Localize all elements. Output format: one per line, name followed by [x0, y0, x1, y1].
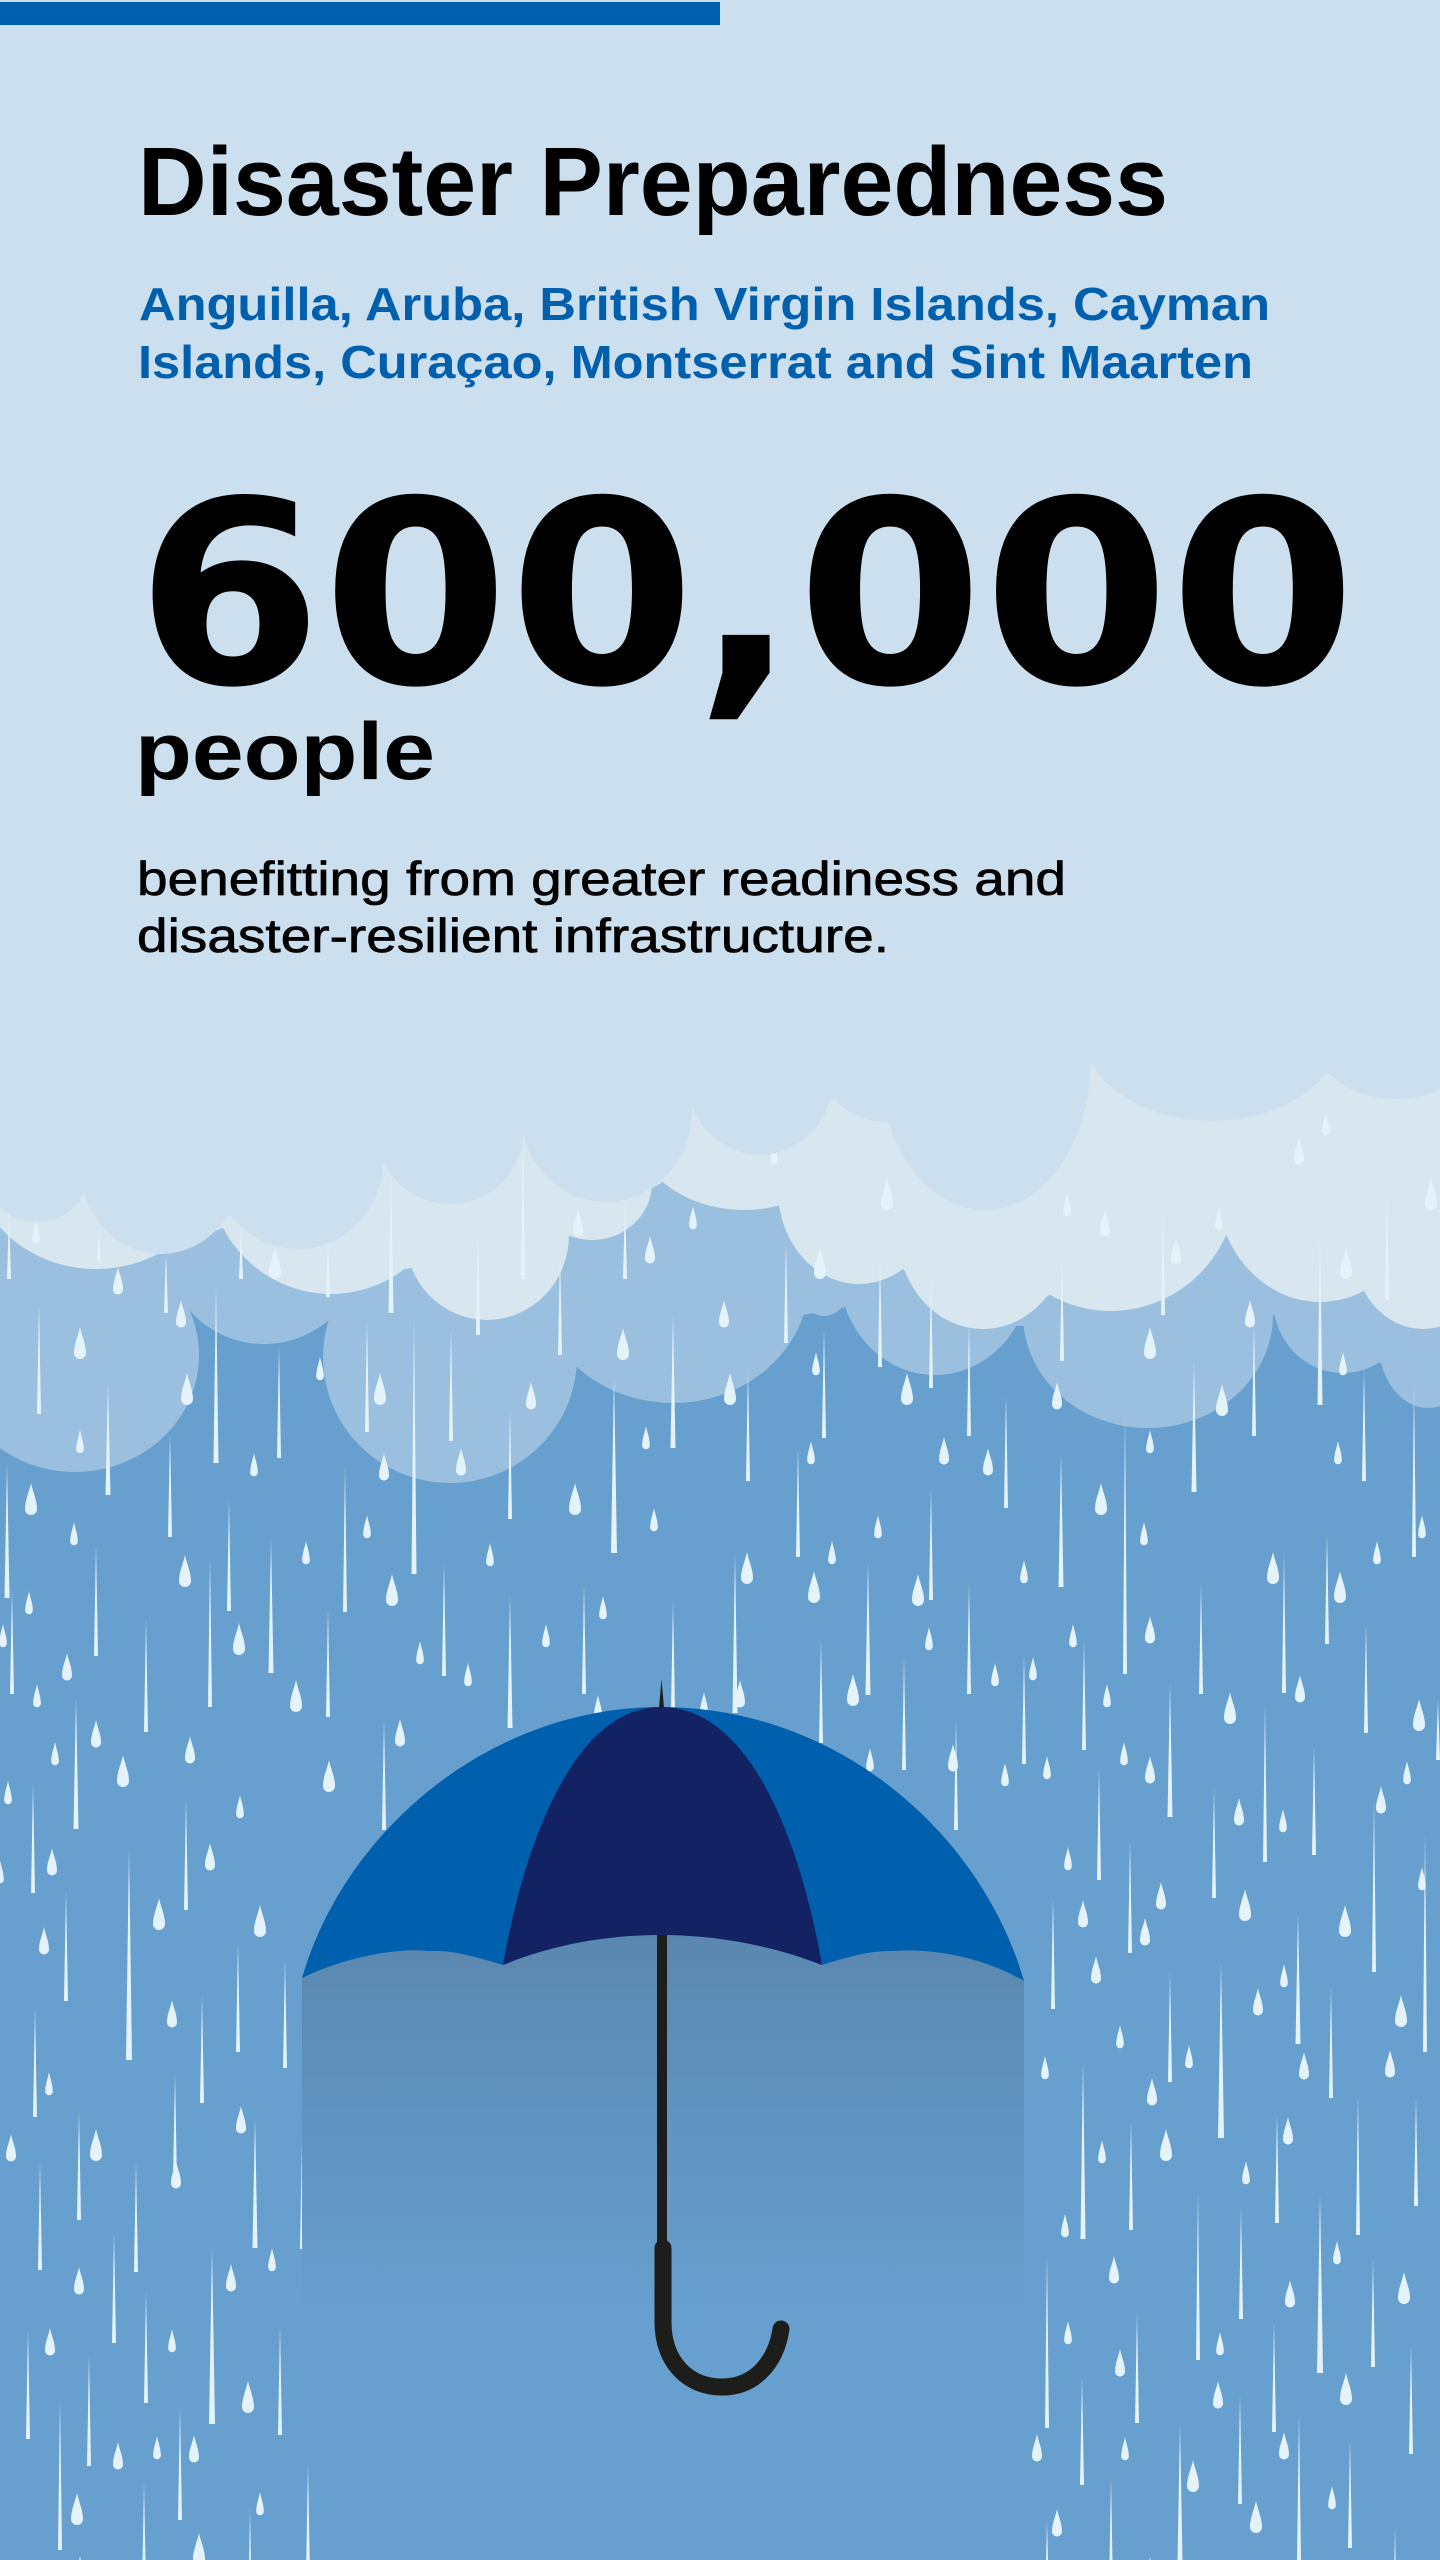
subtitle: territories: Anguilla, Aruba, British Virgin Islands, Cayman: [139, 278, 1270, 330]
cloud layer: top, sky-coloured panel: [0, 0, 1440, 1254]
umbrella shaft: [657, 1935, 667, 2245]
umbrella centre panel: [503, 1707, 822, 1965]
subtitle: territories: [138, 278, 1270, 388]
description: [137, 852, 1066, 962]
umbrella: [302, 1679, 1024, 2387]
rain streaks: [4, 1132, 1440, 2560]
unit label: people: [135, 707, 435, 797]
top accent bar: [0, 2, 720, 25]
raindrops: [0, 1112, 1437, 2560]
title: Disaster Preparedness: [138, 127, 1168, 236]
umbrella canopy: [302, 1707, 1024, 1981]
umbrella tip: [659, 1679, 664, 1708]
umbrella handle: [663, 2248, 781, 2387]
big number: 600,000: [136, 447, 1356, 744]
description: disaster-resilient infrastructure.: [137, 909, 889, 962]
subtitle: territories: Islands, Curaçao, Montserrat and Sint Maarten: [138, 336, 1253, 388]
cloud layer: lower medium blue: [0, 1000, 1440, 1483]
description: benefitting from greater readiness and: [137, 852, 1066, 905]
cloud layer: middle pale: [0, 900, 1440, 1329]
dry shaded area under umbrella: [302, 1935, 1024, 2320]
